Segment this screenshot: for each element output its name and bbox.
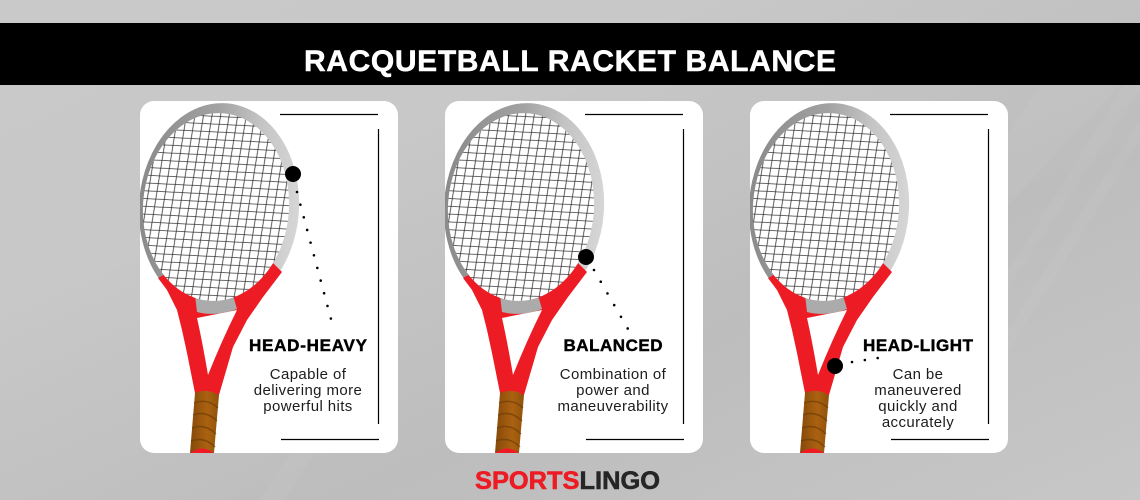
description: power and <box>576 382 650 399</box>
racket illustration <box>437 98 611 453</box>
dotted leader <box>594 270 628 329</box>
title: RACQUETBALL RACKET BALANCE <box>304 45 836 78</box>
heading: BALANCED <box>564 336 662 355</box>
dotted leader <box>852 358 878 362</box>
description: powerful hits <box>263 398 353 415</box>
balance point marker <box>285 166 301 182</box>
description: quickly and <box>878 398 958 415</box>
racket illustration <box>132 98 306 453</box>
balance point marker <box>827 358 843 374</box>
frame lines <box>585 114 684 440</box>
description: delivering more <box>254 382 362 399</box>
balance point marker <box>578 249 594 265</box>
description: maneuvered <box>874 382 962 399</box>
description: Combination of <box>560 366 667 383</box>
heading: HEAD-HEAVY <box>249 336 368 355</box>
description: Can be <box>893 366 943 383</box>
description: accurately <box>882 414 954 431</box>
heading: HEAD-LIGHT <box>863 336 974 355</box>
panel: head-light <box>742 98 1008 453</box>
frame lines <box>280 114 379 440</box>
header band <box>0 23 1140 85</box>
logo: SPORTSLINGO <box>475 467 660 495</box>
panel: head-heavy <box>132 98 398 453</box>
panel: balanced <box>437 98 703 453</box>
description: Capable of <box>270 366 347 383</box>
frame lines <box>890 114 989 440</box>
dotted leader <box>297 192 331 319</box>
description: maneuverability <box>557 398 669 415</box>
racket illustration <box>742 98 916 453</box>
